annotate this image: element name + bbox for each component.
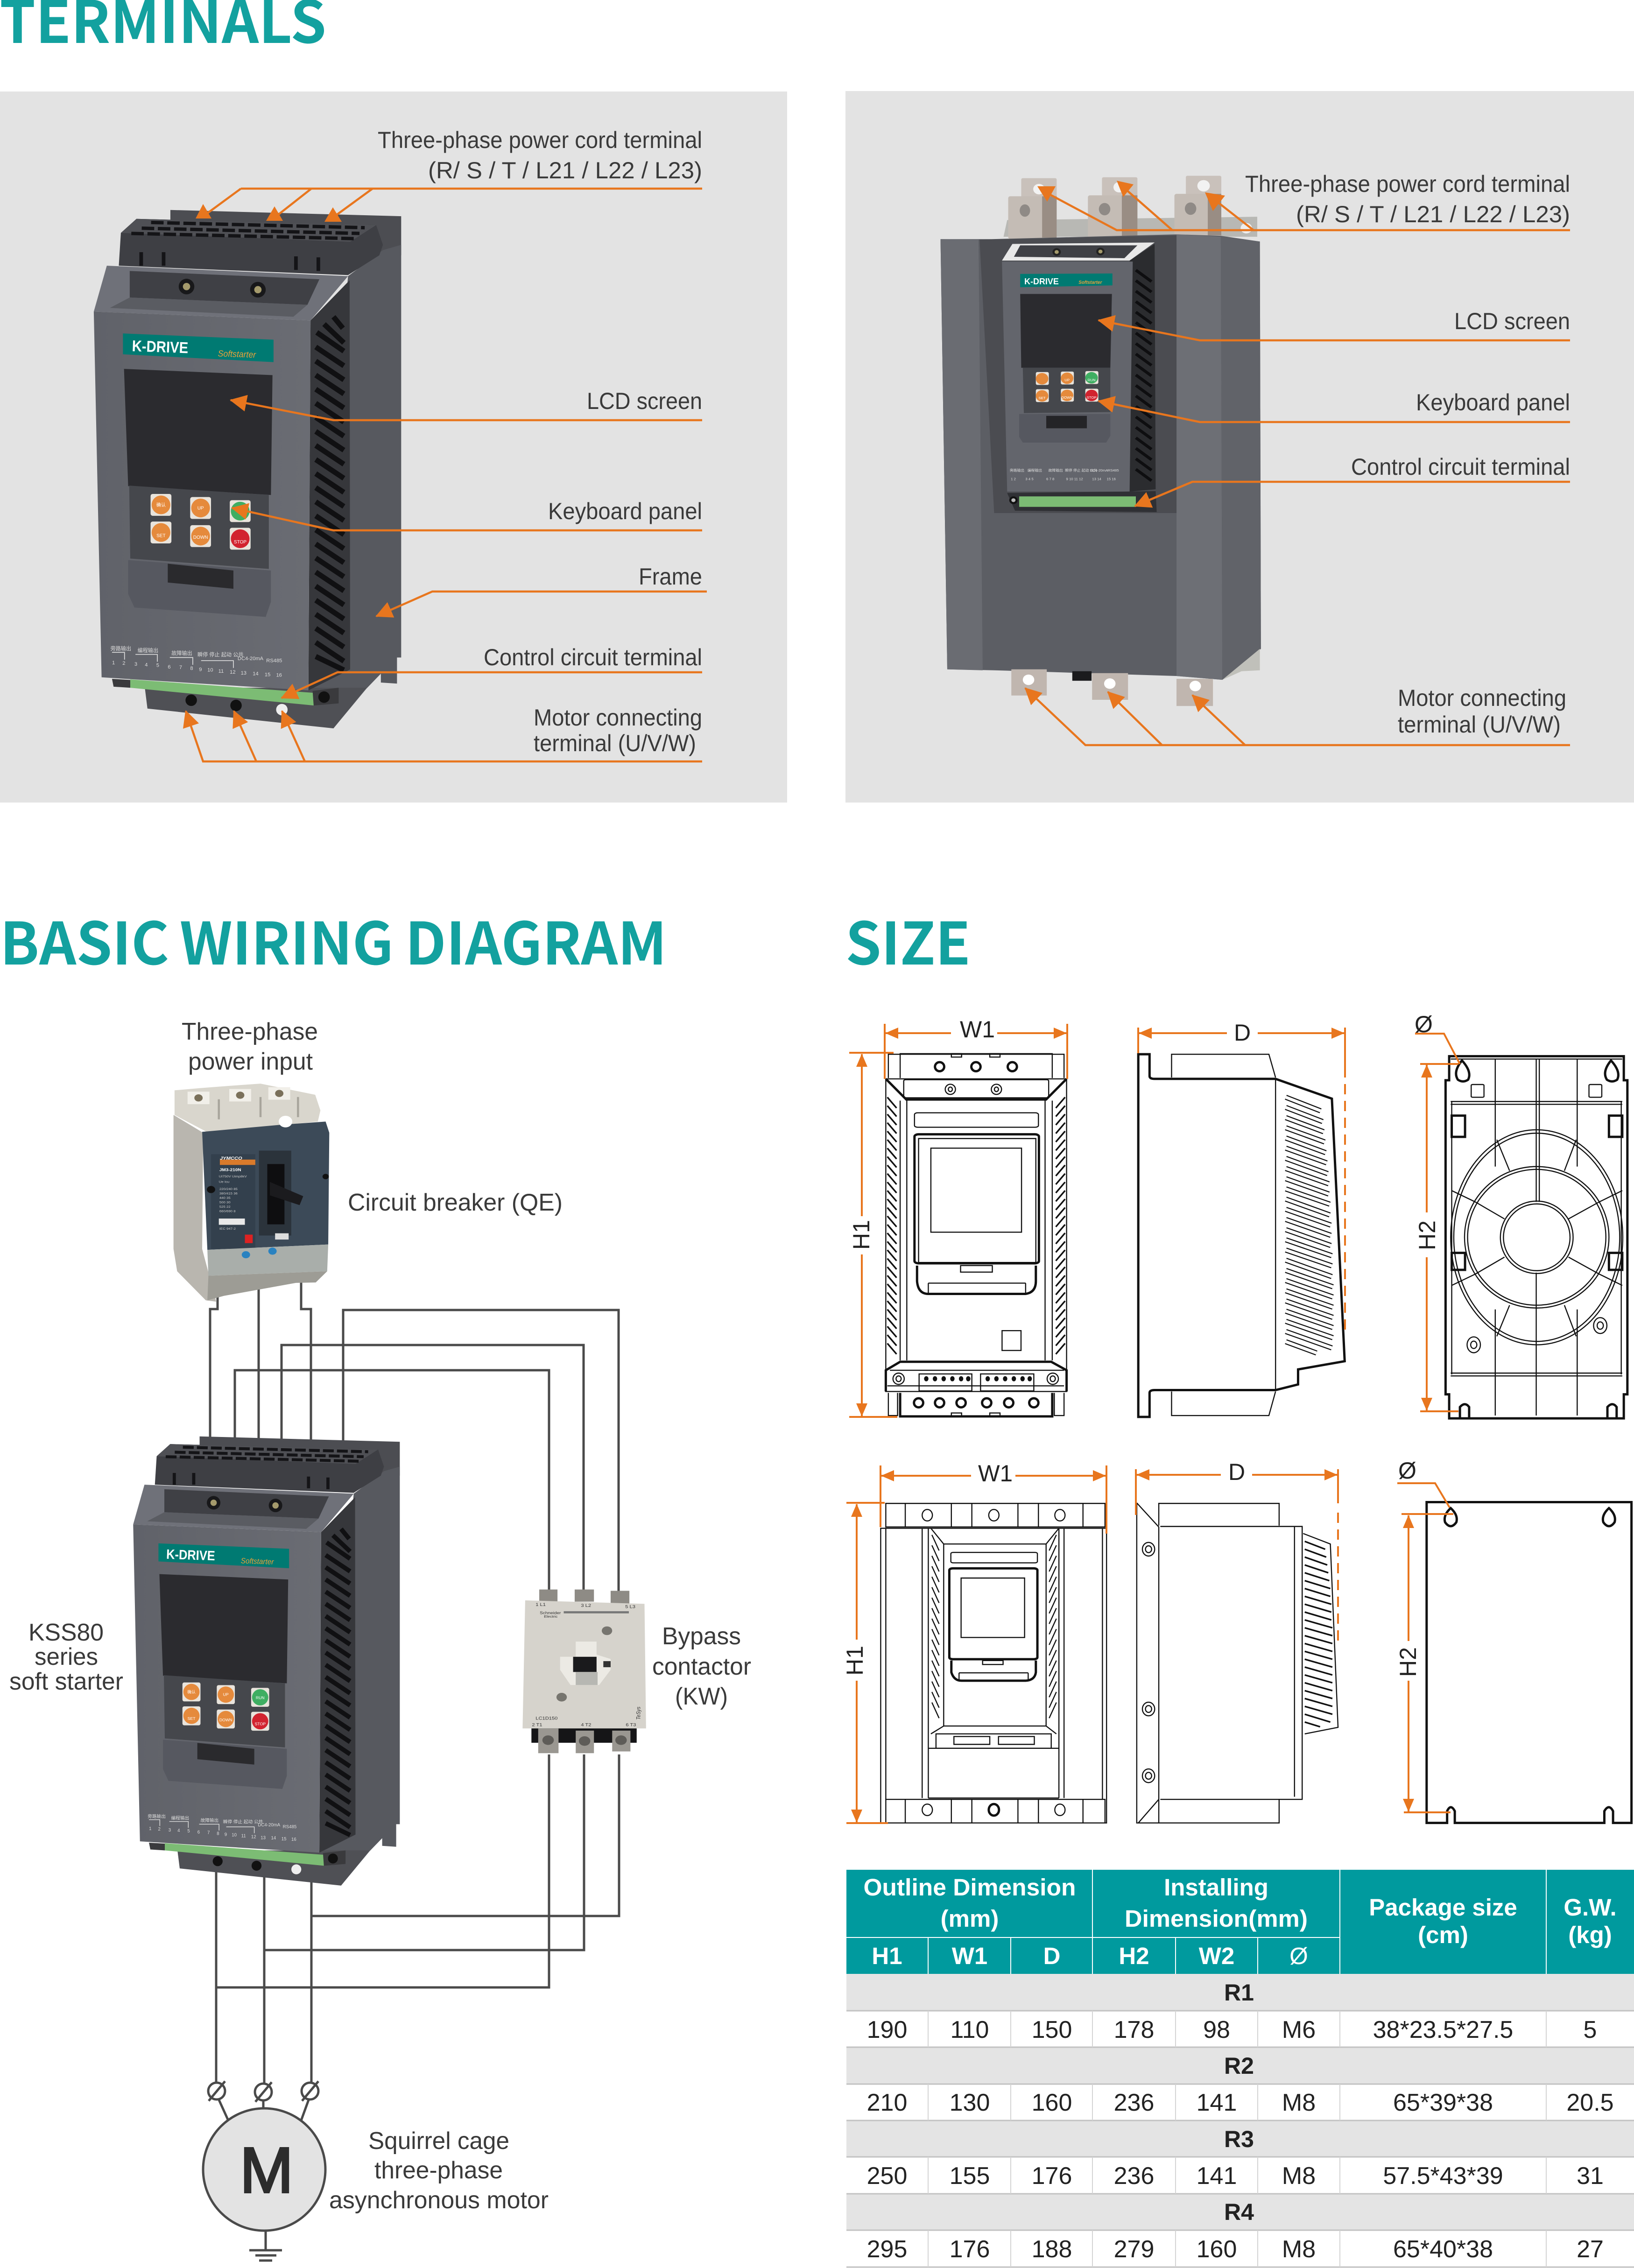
table rows: 130 — [950, 2089, 990, 2116]
device photo: high power soft starter: RS485 — [1108, 469, 1119, 472]
table header: Installing — [1164, 1874, 1268, 1901]
callout: motor connecting terminal: Motor connecting — [1398, 685, 1566, 711]
dimension: diameter — [1415, 1011, 1460, 1064]
device: KSS80 soft starter: 故障输出 — [200, 1818, 218, 1824]
table header: W2 — [1199, 1943, 1234, 1969]
dimension: H1: H1 — [842, 1646, 868, 1676]
table rows: 210 — [867, 2089, 907, 2116]
device photo: high power soft starter: 故障输出 — [1049, 468, 1063, 472]
device: bypass contactor: Electric — [544, 1615, 557, 1619]
device photo: compact soft starter: 确认 — [156, 502, 166, 508]
table rows: 190 — [867, 2016, 907, 2043]
label: squirrel cage motor: Squirrel cage — [368, 2127, 509, 2155]
dimension: H2: H2 — [1414, 1220, 1440, 1250]
callout: LCD screen: LCD screen — [1454, 308, 1570, 334]
device photo: compact soft starter: 2 — [122, 661, 125, 666]
device photo: high power soft starter: RUN — [1088, 378, 1096, 382]
device: circuit breaker: IEC 947-2 — [219, 1227, 236, 1231]
table rows: 160 — [1197, 2236, 1237, 2263]
device: circuit breaker: JYMCCO — [220, 1156, 242, 1161]
device photo: compact soft starter: Softstarter — [218, 349, 256, 360]
table header: (cm) — [1418, 1922, 1468, 1948]
size drawing: side view R2-R4 — [1136, 1459, 1338, 1823]
device: circuit breaker: Ue Icu — [219, 1180, 229, 1183]
callout: control circuit terminal — [282, 644, 702, 698]
icon: motor: M — [240, 2134, 293, 2206]
device: KSS80 soft starter: 10 — [232, 1832, 237, 1838]
label: KSS80 series soft starter: KSS80 — [28, 1619, 104, 1646]
table rows: M8 — [1282, 2089, 1316, 2116]
device: KSS80 soft starter: 12 — [251, 1834, 256, 1839]
device photo: high power soft starter: STOP — [1087, 395, 1097, 400]
device: circuit breaker: 525 22 — [219, 1205, 231, 1209]
table rows: R4 — [1224, 2199, 1254, 2225]
table rows: 27 — [1577, 2236, 1604, 2263]
table header: G.W. — [1564, 1894, 1617, 1921]
device photo: high power soft starter: 1 2 — [1011, 477, 1016, 481]
dimension: diameter: Ø — [1398, 1458, 1416, 1484]
device: circuit breaker: UI750V Uimp8kV — [219, 1175, 247, 1178]
table header: W1 — [952, 1943, 987, 1969]
device photo: compact soft starter: 12 — [230, 669, 236, 675]
callout: LCD screen: LCD screen — [587, 388, 702, 414]
wiring diagram — [9, 1018, 751, 2261]
size drawing: mounting plate R2-R4 — [1395, 1458, 1632, 1823]
callout: LCD screen — [231, 388, 702, 420]
device photo: compact soft starter: 11 — [218, 669, 224, 674]
device: KSS80 soft starter: STOP — [254, 1722, 266, 1726]
table rows: 176 — [1032, 2162, 1072, 2190]
dimension: D — [1138, 1020, 1345, 1333]
callout: LCD screen — [1099, 308, 1570, 340]
device: KSS80 soft starter: SET — [188, 1716, 196, 1721]
table rows: 236 — [1114, 2162, 1154, 2190]
device photo: compact soft starter: 故障输出 — [171, 650, 192, 656]
size drawing: side view R1 — [1138, 1020, 1345, 1417]
device: circuit breaker: 500 30 — [219, 1200, 231, 1204]
label: bypass contactor: Bypass — [662, 1623, 741, 1650]
device photo: compact soft starter: STOP — [234, 540, 247, 545]
callout: three-phase power cord terminal: Three-phase power cord terminal — [1245, 171, 1570, 197]
device: KSS80 soft starter: 14 — [271, 1836, 276, 1841]
callout: control circuit terminal: Control circuit terminal — [484, 644, 702, 670]
device: bypass contactor: 1 L1 — [535, 1603, 546, 1607]
table rows: 98 — [1203, 2016, 1230, 2043]
device photo: high power soft starter: 6 7 8 — [1046, 477, 1054, 481]
size drawing: back view R1 — [1414, 1011, 1627, 1418]
heading: basic wiring diagram: WIRING — [180, 897, 394, 981]
table rows — [846, 1974, 1634, 2267]
device: KSS80 soft starter: 15 — [282, 1837, 286, 1842]
device: bypass contactor: 5 L3 — [625, 1605, 635, 1609]
device: KSS80 soft starter: UP — [223, 1692, 229, 1697]
device: KSS80 soft starter: 4 — [177, 1828, 180, 1833]
callout: control circuit terminal: Control circuit terminal — [1351, 454, 1570, 480]
table rows: M8 — [1282, 2162, 1316, 2190]
device: KSS80 soft starter: 1 — [149, 1826, 151, 1831]
label: squirrel cage motor: three-phase — [374, 2157, 503, 2184]
table rows: 295 — [867, 2236, 907, 2263]
table rows: 31 — [1577, 2162, 1604, 2190]
table rows: 141 — [1197, 2162, 1237, 2190]
device: circuit breaker — [174, 1084, 329, 1302]
heading: basic wiring diagram — [0, 897, 667, 981]
callout: three-phase power cord terminal: (R/ S / T / L21 / L22 / L23) — [1296, 201, 1570, 227]
callout: three-phase power cord terminal: Three-phase power cord terminal — [378, 127, 702, 153]
table header: (mm) — [941, 1905, 999, 1932]
heading: size: SIZE — [845, 897, 971, 981]
panel: terminals of compact soft starter — [0, 92, 787, 803]
device: KSS80 soft starter: Softstarter — [240, 1557, 275, 1566]
label: bypass contactor: contactor — [652, 1653, 751, 1680]
dimension: diameter — [1397, 1458, 1450, 1507]
device photo: compact soft starter: 13 — [241, 670, 247, 676]
device: bypass contactor: 3 L2 — [581, 1604, 591, 1608]
device: bypass contactor: TeSys — [636, 1706, 642, 1720]
device photo: compact soft starter: 编程输出 — [138, 647, 158, 654]
device: bypass contactor: 2 T1 — [532, 1723, 542, 1727]
table rows: 250 — [867, 2162, 907, 2190]
callout: motor connecting terminal: terminal (U/V/W) — [1398, 711, 1561, 738]
device: circuit breaker: 440 35 — [219, 1196, 231, 1200]
device photo: compact soft starter: 5 — [156, 662, 159, 668]
dimension: H1: H1 — [848, 1220, 874, 1250]
callout: motor connecting terminal — [1025, 685, 1570, 745]
dimension: H2 — [1395, 1514, 1453, 1812]
table rows: 155 — [950, 2162, 990, 2190]
device photo: compact soft starter: 7 — [179, 665, 182, 670]
device photo: high power soft starter: 3 4 5 — [1025, 477, 1034, 481]
dimension: W1 — [880, 1460, 1106, 1534]
device: bypass contactor: 6 T3 — [626, 1723, 636, 1727]
device: KSS80 soft starter: 3 — [169, 1828, 171, 1833]
device: bypass contactor: Schneider — [540, 1611, 561, 1615]
size table — [846, 1870, 1634, 2267]
callout: frame: Frame — [639, 563, 702, 590]
device photo: high power soft starter: UP — [1064, 378, 1070, 382]
device photo: compact soft starter: SET — [156, 534, 166, 539]
device: circuit breaker: 660/690 8 — [219, 1209, 236, 1213]
table rows: 188 — [1032, 2236, 1072, 2263]
device photo: high power soft starter: 编程输出 — [1028, 468, 1042, 472]
device photo: compact soft starter: DOWN — [193, 535, 208, 540]
table rows: M6 — [1282, 2016, 1316, 2043]
table header: H2 — [1119, 1943, 1149, 1969]
table header: Dimension(mm) — [1125, 1905, 1308, 1932]
label: bypass contactor: (KW) — [675, 1683, 728, 1710]
callout: control circuit terminal — [1135, 454, 1570, 506]
table rows: 5 — [1584, 2016, 1597, 2043]
device photo: compact soft starter: UP — [197, 506, 204, 511]
device photo: compact soft starter: 10 — [207, 668, 213, 673]
device photo: compact soft starter: K-DRIVE — [132, 338, 189, 357]
label: KSS80 series soft starter: series — [35, 1643, 98, 1670]
device: bypass contactor: 4 T2 — [581, 1723, 592, 1727]
dimension: diameter: Ø — [1415, 1011, 1433, 1037]
device: KSS80 soft starter: 7 — [207, 1831, 210, 1836]
table header: Ø — [1289, 1943, 1308, 1969]
icon: motor — [203, 2108, 325, 2231]
device photo: high power soft starter: SET — [1039, 396, 1046, 400]
device photo: compact soft starter: 4 — [145, 662, 148, 668]
label: KSS80 series soft starter: soft starter — [9, 1668, 123, 1695]
dimension: W1: W1 — [960, 1016, 995, 1042]
dimension: H2 — [1414, 1064, 1458, 1411]
device photo: compact soft starter — [94, 210, 401, 728]
table rows: R3 — [1224, 2126, 1254, 2152]
device: KSS80 soft starter: DOWN — [219, 1718, 232, 1722]
device photo: high power soft starter: 旁路输出 — [1010, 468, 1024, 472]
device photo: compact soft starter: 6 — [168, 664, 171, 670]
callout: motor connecting terminal — [186, 704, 702, 761]
device: KSS80 soft starter: 瞬停 停止 起动 公共 — [223, 1819, 263, 1824]
dimension: W1 — [885, 1016, 1067, 1079]
label: circuit breaker: Circuit breaker (QE) — [348, 1189, 563, 1216]
device: KSS80 soft starter: 16 — [291, 1837, 296, 1842]
dimension: D — [1136, 1459, 1338, 1642]
table rows: R1 — [1224, 1979, 1254, 2006]
callout: three-phase power cord terminal — [1037, 171, 1570, 230]
label: bypass contactor — [652, 1623, 751, 1710]
table header: H1 — [872, 1943, 902, 1969]
device photo: high power soft starter: 瞬停 停止 起动 公共 — [1065, 468, 1098, 472]
device photo: high power soft starter: DC4-20mA — [1090, 469, 1108, 472]
dimension: H1 — [842, 1503, 888, 1823]
callout: motor connecting terminal: Motor connecting — [534, 704, 702, 731]
device photo: compact soft starter: 9 — [199, 667, 202, 672]
table rows: 150 — [1032, 2016, 1072, 2043]
callout: three-phase power cord terminal: (R/ S / T / L21 / L22 / L23) — [428, 157, 702, 183]
table header: Outline Dimension — [864, 1874, 1076, 1901]
device: KSS80 soft starter: 旁路输出 — [148, 1814, 166, 1819]
panel: terminals of high power soft starter — [845, 91, 1634, 803]
device photo: high power soft starter: 15 16 — [1106, 477, 1116, 481]
device: KSS80 soft starter: 9 — [225, 1832, 227, 1837]
device photo: compact soft starter: 8 — [190, 666, 193, 671]
device photo: compact soft starter: 旁路输出 — [111, 645, 131, 652]
device photo: high power soft starter: Softstarter — [1078, 280, 1102, 285]
dimension: W1: W1 — [978, 1460, 1013, 1486]
label: three-phase power input: power input — [188, 1048, 313, 1075]
device: circuit breaker: 220/240 85 — [219, 1187, 238, 1191]
table rows: 65*40*38 — [1393, 2236, 1493, 2263]
label: KSS80 series soft starter — [9, 1619, 123, 1695]
device: KSS80 soft starter: 编程输出 — [171, 1816, 189, 1821]
dimension: D: D — [1234, 1020, 1251, 1046]
device: KSS80 soft starter: K-DRIVE — [166, 1547, 215, 1564]
size drawing: front view R1 — [848, 1016, 1067, 1417]
device: circuit breaker: 380/415 36 — [219, 1191, 238, 1195]
device: KSS80 soft starter: RUN — [256, 1695, 265, 1700]
table rows: 279 — [1114, 2236, 1154, 2263]
table rows: 65*39*38 — [1393, 2089, 1493, 2116]
device: KSS80 soft starter: 2 — [158, 1827, 161, 1832]
device: KSS80 soft starter: 6 — [197, 1830, 200, 1835]
dimension: H1 — [848, 1053, 897, 1417]
device: circuit breaker: JM3-210N — [219, 1168, 241, 1172]
device: KSS80 soft starter: RS485 — [283, 1824, 296, 1830]
callout: motor connecting terminal: terminal (U/V/W) — [534, 730, 696, 756]
device photo: compact soft starter: 16 — [276, 673, 282, 678]
table rows: 141 — [1197, 2089, 1237, 2116]
table rows: 38*23.5*27.5 — [1373, 2016, 1513, 2043]
table header: (kg) — [1568, 1922, 1612, 1948]
label: squirrel cage motor — [329, 2127, 549, 2214]
dimension: H2: H2 — [1395, 1647, 1421, 1677]
table rows: 178 — [1114, 2016, 1154, 2043]
heading: basic wiring diagram: BASIC — [0, 897, 169, 981]
callout: keyboard panel — [232, 498, 702, 530]
label: squirrel cage motor: asynchronous motor — [329, 2187, 549, 2214]
callout: keyboard panel: Keyboard panel — [1416, 389, 1570, 416]
device: KSS80 soft starter: 5 — [187, 1829, 190, 1834]
icon: ground — [249, 2231, 282, 2261]
table header: D — [1043, 1943, 1060, 1969]
table header: Package size — [1369, 1894, 1517, 1921]
device: KSS80 soft starter: 13 — [261, 1835, 266, 1840]
device photo: high power soft starter: K-DRIVE — [1024, 277, 1059, 287]
device photo: high power soft starter — [940, 176, 1261, 706]
device photo: compact soft starter: 15 — [265, 672, 270, 678]
callout: keyboard panel — [1099, 389, 1570, 422]
device: KSS80 soft starter: 11 — [241, 1833, 246, 1838]
table rows: 20.5 — [1566, 2089, 1614, 2116]
size drawing: front view R2-R4 — [842, 1460, 1106, 1823]
label: three-phase power input — [182, 1018, 318, 1075]
device photo: compact soft starter: 3 — [134, 662, 137, 667]
wires — [210, 1282, 619, 2083]
terminal symbols — [208, 2081, 318, 2120]
device photo: compact soft starter: 瞬停 停止 起动 公共 — [197, 651, 244, 658]
callout: three-phase power cord terminal — [196, 127, 702, 222]
device: KSS80 soft starter: DC4-20mA — [258, 1823, 281, 1828]
table rows: 176 — [950, 2236, 990, 2263]
device photo: high power soft starter: DOWN — [1061, 395, 1073, 400]
table header — [846, 1870, 1634, 1974]
device photo: high power soft starter: 9 10 11 12 — [1066, 477, 1083, 481]
device: KSS80 soft starter — [133, 1437, 400, 1886]
callout: keyboard panel: Keyboard panel — [548, 498, 702, 524]
device photo: compact soft starter: 1 — [112, 660, 115, 666]
device photo: compact soft starter: RS485 — [266, 658, 282, 663]
device: bypass contactor: LC1D150 — [535, 1716, 558, 1721]
table rows: M8 — [1282, 2236, 1316, 2263]
device photo: compact soft starter: DC4-20mA — [238, 656, 264, 662]
table rows: 160 — [1032, 2089, 1072, 2116]
device: KSS80 soft starter: 8 — [217, 1831, 219, 1837]
label: three-phase power input: Three-phase — [182, 1018, 318, 1045]
table rows: 110 — [951, 2016, 989, 2043]
table rows: 57.5*43*39 — [1383, 2162, 1503, 2190]
heading: basic wiring diagram: DIAGRAM — [405, 897, 667, 981]
device photo: high power soft starter: 13 14 — [1092, 477, 1101, 481]
device: bypass contactor — [522, 1590, 646, 1753]
callout: frame — [376, 563, 707, 616]
table rows: R2 — [1224, 2053, 1254, 2079]
dimension: D: D — [1228, 1459, 1245, 1485]
device photo: compact soft starter: 14 — [253, 671, 259, 676]
device: KSS80 soft starter: 确认 — [187, 1689, 196, 1694]
table rows: 236 — [1114, 2089, 1154, 2116]
